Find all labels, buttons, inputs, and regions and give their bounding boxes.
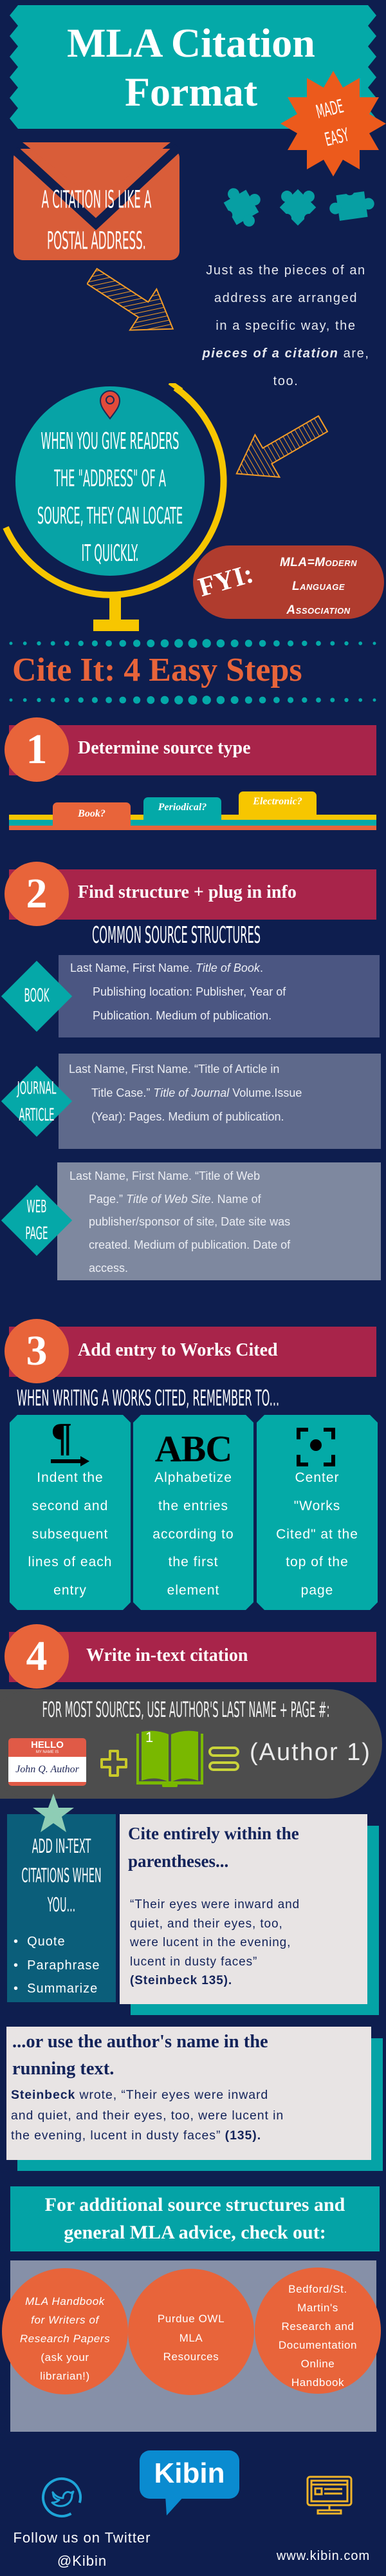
card: center: top of the bbox=[286, 1555, 349, 1569]
text: pieces of an address: too. bbox=[273, 374, 299, 388]
panel: book structure: BOOK bbox=[24, 985, 50, 1007]
card: center: "Works bbox=[294, 1499, 340, 1513]
card: center: page bbox=[301, 1583, 333, 1598]
icon: star bbox=[33, 1794, 74, 1832]
card: alphabetize: element bbox=[167, 1583, 219, 1598]
panel: add in-text citations when you: • Summarize bbox=[14, 1982, 98, 1996]
globe with text: IT QUICKLY. bbox=[81, 540, 139, 567]
envelope: citation like postal address: POSTAL ADDRESS. bbox=[47, 228, 146, 255]
panel: journal article structure: ARTICLE bbox=[19, 1104, 55, 1125]
arrow: hatched pointing down-right bbox=[87, 268, 174, 331]
panel: cite entirely within parentheses: Cite entirely within the bbox=[128, 1824, 299, 1843]
title banner: MLA Citation bbox=[67, 20, 315, 66]
globe with text: WHEN YOU GIVE READERS bbox=[41, 428, 179, 455]
text: pieces of an address bbox=[202, 263, 370, 388]
circle: Bedford/St. Martin's bbox=[255, 2268, 381, 2394]
card: alphabetize bbox=[133, 1415, 253, 1610]
panel: web page structure bbox=[1, 1162, 381, 1280]
panel: journal article structure bbox=[1, 1054, 381, 1149]
circle: Bedford/St. Martin's: Research and bbox=[281, 2320, 354, 2333]
dotted dividers bbox=[9, 639, 376, 705]
circle: MLA handbook: librarian!) bbox=[40, 2370, 90, 2382]
text: pieces of an address: in a specific way, the bbox=[216, 319, 356, 333]
tabs: Book / Periodical / Electronic: Book? bbox=[78, 808, 106, 819]
card: center: Center bbox=[295, 1470, 340, 1485]
footer: website: www.kibin.com bbox=[277, 2549, 370, 2563]
title banner bbox=[10, 5, 376, 129]
circle: Bedford/St. Martin's: Documentation bbox=[279, 2339, 357, 2351]
panel: book structure: Publishing location: Publisher, Year of bbox=[93, 985, 286, 998]
icon: monitor bbox=[306, 2476, 353, 2514]
logo: Kibin speech bubble bbox=[140, 2450, 239, 2515]
icon: focus brackets bbox=[297, 1428, 335, 1466]
panel: add in-text citations when you: YOU... bbox=[48, 1893, 75, 1917]
card: alphabetize: the entries bbox=[158, 1499, 228, 1513]
panel: cite entirely within parentheses: (Steinbeck 135). bbox=[130, 1974, 232, 1987]
panel: web page structure: PAGE bbox=[25, 1223, 48, 1244]
circle: Purdue OWL bbox=[128, 2269, 254, 2395]
circle: Bedford/St. Martin's: Handbook bbox=[291, 2376, 344, 2389]
panel: book structure: Publication. Medium of publication. bbox=[93, 1009, 271, 1021]
card: center bbox=[257, 1415, 378, 1610]
envelope: citation like postal address: A CITATION IS LIKE A bbox=[42, 187, 151, 214]
card: indent: subsequent bbox=[32, 1526, 108, 1542]
footer: follow us on twitter: @Kibin bbox=[57, 2553, 107, 2569]
icon: plus bbox=[100, 1750, 127, 1777]
icon: open book bbox=[136, 1731, 203, 1787]
panel: web page structure: publisher/sponsor of site, Date site was bbox=[89, 1215, 290, 1228]
card: alphabetize: Alphabetize bbox=[154, 1470, 232, 1485]
card: indent: lines of each bbox=[28, 1555, 112, 1569]
step 2 header: 2 bbox=[26, 870, 48, 917]
step 4 header: 4 bbox=[26, 1633, 48, 1680]
step 4 header: Write in-text citation bbox=[86, 1645, 248, 1665]
step 3 header: Add entry to Works Cited bbox=[78, 1340, 278, 1360]
callout: FYI MLA = Modern Language Association bbox=[193, 545, 384, 619]
globe with text bbox=[3, 383, 227, 631]
circle: MLA handbook bbox=[2, 2268, 128, 2394]
icon: name tag: John Q. Author bbox=[15, 1764, 79, 1775]
panel: author + page formula: 1 bbox=[145, 1729, 153, 1745]
panel: journal article structure: Title Case.” Title of Journal Volume.Issue bbox=[91, 1086, 302, 1099]
card: alphabetize: according to bbox=[152, 1526, 234, 1542]
step 1 header: 1 bbox=[26, 726, 48, 773]
panel: author's name in running text bbox=[6, 2027, 383, 2171]
circle: MLA handbook: (ask your bbox=[41, 2351, 89, 2363]
callout: FYI MLA = Modern Language Association: FYI: bbox=[195, 559, 257, 603]
icon: pilcrow with arrow: ¶ bbox=[51, 1416, 72, 1459]
step 3 header bbox=[5, 1319, 376, 1383]
heading: Cite It: 4 Easy Steps: Cite It: 4 Easy Steps bbox=[12, 652, 302, 688]
panel: author + page formula: (Author 1) bbox=[250, 1739, 371, 1766]
subheading: common source structures: COMMON SOURCE STRUCTURES bbox=[92, 922, 261, 949]
icon: name tag: MY NAME IS bbox=[36, 1750, 59, 1754]
icon: name tag: HELLO bbox=[31, 1739, 64, 1750]
step 1 header: Determine source type bbox=[78, 738, 251, 758]
panel: cite entirely within parentheses: were lucent in the evening, bbox=[130, 1936, 291, 1949]
panel: cite entirely within parentheses bbox=[120, 1814, 379, 2015]
step 2 header: Find structure + plug in info bbox=[78, 882, 297, 902]
globe with text: THE "ADDRESS" OF A bbox=[54, 466, 166, 493]
card: indent: second and bbox=[32, 1499, 108, 1513]
circle: Bedford/St. Martin's: Online bbox=[301, 2358, 335, 2370]
callout: FYI MLA = Modern Language Association: MLA=Modern bbox=[280, 556, 357, 569]
icon: twitter bbox=[41, 2477, 82, 2518]
circle: Bedford/St. Martin's: Martin's bbox=[297, 2302, 338, 2314]
icon: equals bbox=[208, 1747, 239, 1771]
step 3 header: 3 bbox=[26, 1327, 48, 1374]
panel: cite entirely within parentheses: quiet, and their eyes, too, bbox=[130, 1917, 283, 1931]
panel: journal article structure: JOURNAL bbox=[17, 1077, 56, 1099]
callout: FYI MLA = Modern Language Association: Language bbox=[292, 580, 345, 593]
panel: add in-text citations when you: • Quote bbox=[14, 1935, 66, 1949]
circle: MLA handbook: Research Papers bbox=[20, 2333, 110, 2345]
card: indent bbox=[10, 1415, 131, 1610]
banner: additional resources heading bbox=[10, 2186, 380, 2251]
panel: web page structure: Last Name, First Name. “Title of Web bbox=[69, 1170, 260, 1182]
panel: author's name in running text: and quiet, and their eyes, too, were lucent in bbox=[11, 2108, 284, 2123]
panel: book structure: Last Name, First Name. Title of Book. bbox=[70, 961, 263, 974]
tabs: Book / Periodical / Electronic: Electronic? bbox=[253, 796, 302, 807]
panel: add in-text citations when you: CITATIONS WHEN bbox=[21, 1864, 102, 1887]
panel: author + page formula: FOR MOST SOURCES, USE AUTHOR'S LAST NAME + PAGE #: bbox=[42, 1698, 329, 1722]
text: pieces of an address: Just as the pieces of an bbox=[206, 263, 366, 278]
globe with text: SOURCE, THEY CAN LOCATE bbox=[37, 503, 183, 530]
text: pieces of an address: pieces of a citation are, bbox=[202, 346, 370, 361]
panel: add in-text citations when you: ADD IN-TEXT bbox=[32, 1834, 91, 1857]
panel: journal article structure: (Year): Pages. Medium of publication. bbox=[91, 1110, 284, 1123]
card: alphabetize: the first bbox=[169, 1555, 218, 1569]
footer: follow us on twitter bbox=[13, 2530, 151, 2569]
panel: add in-text citations when you bbox=[7, 1794, 116, 2002]
banner: additional resources heading: For additional source structures and bbox=[45, 2194, 345, 2215]
circle: MLA handbook: MLA Handbook bbox=[25, 2295, 105, 2307]
title banner: Format bbox=[125, 69, 257, 115]
panel: cite entirely within parentheses: “Their eyes were inward and bbox=[130, 1898, 300, 1911]
step 1 header bbox=[5, 717, 376, 782]
panel: author's name in running text: Steinbeck wrote, “Their eyes were inward bbox=[11, 2088, 268, 2102]
badge: made easy: MADE bbox=[314, 95, 345, 123]
card: indent: entry bbox=[53, 1583, 87, 1598]
panel: author's name in running text: the evening, lucent in dusty faces” (135). bbox=[11, 2128, 261, 2143]
tabs: Book / Periodical / Electronic: Periodical? bbox=[158, 802, 207, 813]
panel: resources circles bbox=[10, 2260, 376, 2432]
panel: book structure bbox=[1, 955, 380, 1037]
subheading: when writing works cited: WHEN WRITING A WORKS CITED, REMEMBER TO... bbox=[17, 1386, 279, 1412]
card: center: Cited" at the bbox=[276, 1526, 358, 1542]
panel: web page structure: access. bbox=[89, 1262, 128, 1274]
text: pieces of an address: address are arranged bbox=[214, 291, 358, 305]
icon: pilcrow with arrow bbox=[51, 1424, 89, 1466]
banner: additional resources heading: general MLA advice, check out: bbox=[64, 2222, 326, 2243]
badge: made easy: EASY bbox=[322, 124, 351, 151]
circle: Purdue OWL: Resources bbox=[163, 2351, 219, 2363]
circle: Purdue OWL: Purdue OWL bbox=[158, 2313, 225, 2325]
panel: web page structure: created. Medium of publication. Date of bbox=[89, 1238, 290, 1251]
logo: Kibin speech bubble: Kibin bbox=[154, 2458, 225, 2489]
panel: author's name in running text: running text. bbox=[12, 2059, 114, 2079]
icon: name tag bbox=[8, 1738, 86, 1786]
panel: cite entirely within parentheses: parentheses... bbox=[128, 1852, 228, 1871]
icon: ABC: ABC bbox=[155, 1428, 232, 1470]
panel: web page structure: WEB bbox=[26, 1196, 47, 1217]
panel: journal article structure: Last Name, First Name. “Title of Article in bbox=[69, 1063, 279, 1075]
envelope: citation like postal address bbox=[14, 142, 179, 260]
panel: add in-text citations when you: • Paraphrase bbox=[14, 1958, 100, 1972]
tabs: Book / Periodical / Electronic bbox=[9, 791, 376, 830]
step 4 header bbox=[5, 1624, 376, 1689]
panel: cite entirely within parentheses: lucent in dusty faces” bbox=[130, 1955, 257, 1968]
arrow: hatched pointing down-left to globe bbox=[235, 415, 328, 478]
panel: author's name in running text: ...or use the author's name in the bbox=[12, 2032, 268, 2052]
callout: FYI MLA = Modern Language Association: Association bbox=[286, 603, 351, 617]
panel: web page structure: Page.” Title of Web Site. Name of bbox=[89, 1193, 261, 1206]
footer: follow us on twitter: Follow us on Twitter bbox=[13, 2530, 151, 2546]
panel: author + page formula bbox=[0, 1689, 382, 1799]
step 2 header bbox=[5, 862, 376, 926]
circle: Purdue OWL: MLA bbox=[179, 2331, 203, 2344]
badge: made easy bbox=[280, 71, 386, 176]
icons: puzzle pieces bbox=[224, 188, 374, 227]
circle: Bedford/St. Martin's: Bedford/St. bbox=[288, 2283, 347, 2295]
card: indent: Indent the bbox=[37, 1470, 104, 1485]
circle: MLA handbook: for Writers of bbox=[31, 2314, 99, 2326]
